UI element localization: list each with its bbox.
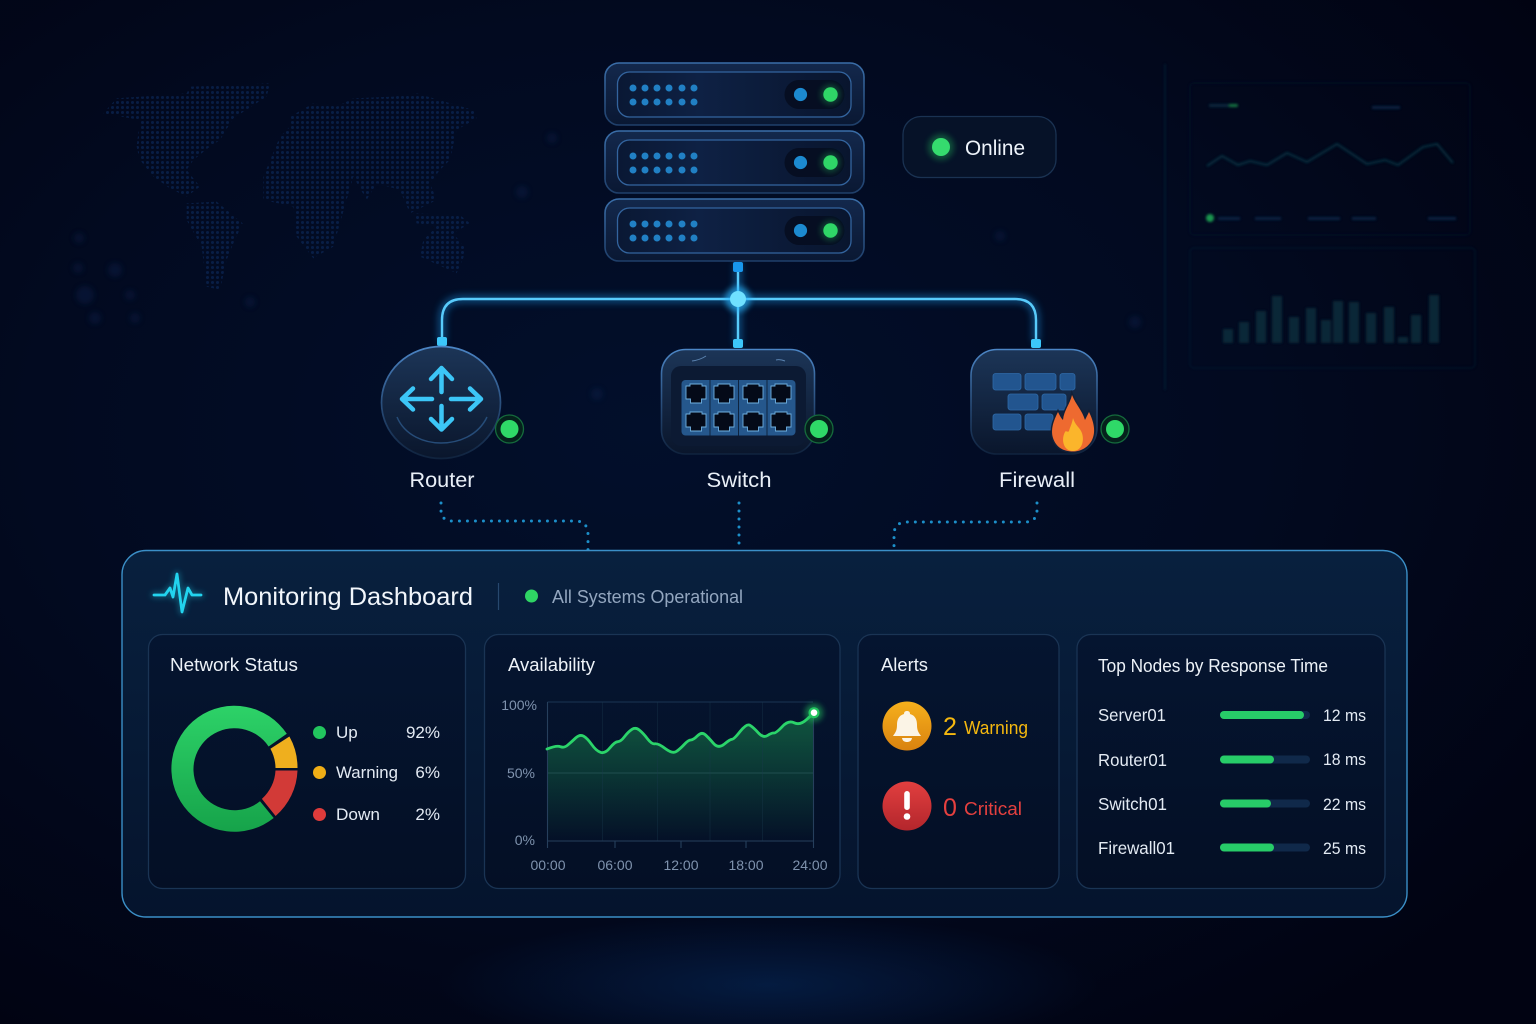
panel: network status: Network Status <box>170 655 298 675</box>
donut legend: 6% <box>415 763 440 782</box>
panel: alerts: Alerts <box>881 655 928 675</box>
junction node <box>725 286 751 312</box>
donut legend: 92% <box>406 723 440 742</box>
router status <box>496 415 524 443</box>
icon: heartbeat <box>154 574 201 612</box>
area chart: 00:00 <box>530 857 566 873</box>
server unit 1 <box>605 63 864 125</box>
area chart: 24:00 <box>792 857 828 873</box>
switch ports <box>682 380 796 436</box>
router device <box>382 346 500 458</box>
donut legend: Up <box>336 723 358 742</box>
donut legend: 2% <box>415 805 440 824</box>
firewall bricks <box>993 374 1075 430</box>
switch device <box>662 350 814 454</box>
row: Router01: Router01 <box>1098 750 1167 770</box>
row: Router01: 18 ms <box>1323 750 1366 769</box>
panel: network status <box>148 634 466 888</box>
row: Firewall01: 25 ms <box>1323 839 1366 858</box>
donut legend: Down <box>336 805 380 824</box>
icon: router arrows <box>402 368 481 430</box>
row: Switch01: 22 ms <box>1323 795 1366 814</box>
firewall status <box>1101 415 1129 443</box>
switch label: Switch <box>706 469 772 492</box>
area chart: 06:00 <box>597 857 633 873</box>
donut legend: Warning <box>336 763 398 782</box>
area chart: 12:00 <box>663 857 699 873</box>
panel: top nodes by response time: Top Nodes by Response Time <box>1098 656 1328 676</box>
online status badge <box>903 116 1056 178</box>
icon: exclamation <box>904 791 910 820</box>
server unit 3 <box>605 199 864 261</box>
donut legend <box>313 723 440 824</box>
device connectors <box>437 337 1041 348</box>
icon: flame <box>1052 395 1094 452</box>
server stack <box>605 63 864 261</box>
row: Server01: 12 ms <box>1323 706 1366 725</box>
area chart: 50% <box>507 765 535 781</box>
critical alert: 0 <box>943 794 957 822</box>
row: Switch01: Switch01 <box>1098 794 1167 814</box>
critical alert <box>882 782 1022 830</box>
warning alert: Warning <box>964 718 1028 738</box>
row: Firewall01 <box>1098 838 1366 858</box>
icon: bell <box>893 711 921 742</box>
area chart: 18:00 <box>728 857 764 873</box>
donut chart <box>171 706 298 832</box>
bottom glow <box>438 915 1098 1024</box>
server unit 2 <box>605 131 864 193</box>
router label: Router <box>410 469 475 492</box>
dashboard title: Monitoring Dashboard <box>223 583 473 611</box>
row: Switch01 <box>1098 794 1366 814</box>
panel: alerts <box>858 634 1059 888</box>
area chart: 0% <box>515 832 535 848</box>
critical alert: Critical <box>964 799 1022 819</box>
warning alert: 2 <box>943 713 957 741</box>
monitoring dashboard panel <box>122 550 1407 917</box>
server connector <box>733 262 743 272</box>
panel: top nodes by response time <box>1077 634 1385 888</box>
firewall device <box>971 350 1097 454</box>
row: Firewall01: Firewall01 <box>1098 838 1175 858</box>
dotted connectors to dashboard <box>441 503 1037 550</box>
row: Server01: Server01 <box>1098 705 1166 725</box>
area chart: 100% <box>501 697 537 713</box>
switch status <box>805 415 833 443</box>
system status: All Systems Operational <box>552 587 743 607</box>
row: Router01 <box>1098 750 1366 770</box>
background ghost dashboard <box>1165 64 1475 390</box>
row: Server01 <box>1098 705 1366 725</box>
area chart <box>501 697 828 873</box>
panel: availability: Availability <box>508 655 595 675</box>
world map backdrop <box>104 84 476 289</box>
panel: availability <box>484 634 840 888</box>
online status badge: Online <box>965 137 1025 160</box>
warning alert <box>882 702 1028 750</box>
connection lines from server to devices <box>437 262 1041 348</box>
firewall label: Firewall <box>999 469 1075 492</box>
faint background nodes <box>73 133 1141 400</box>
